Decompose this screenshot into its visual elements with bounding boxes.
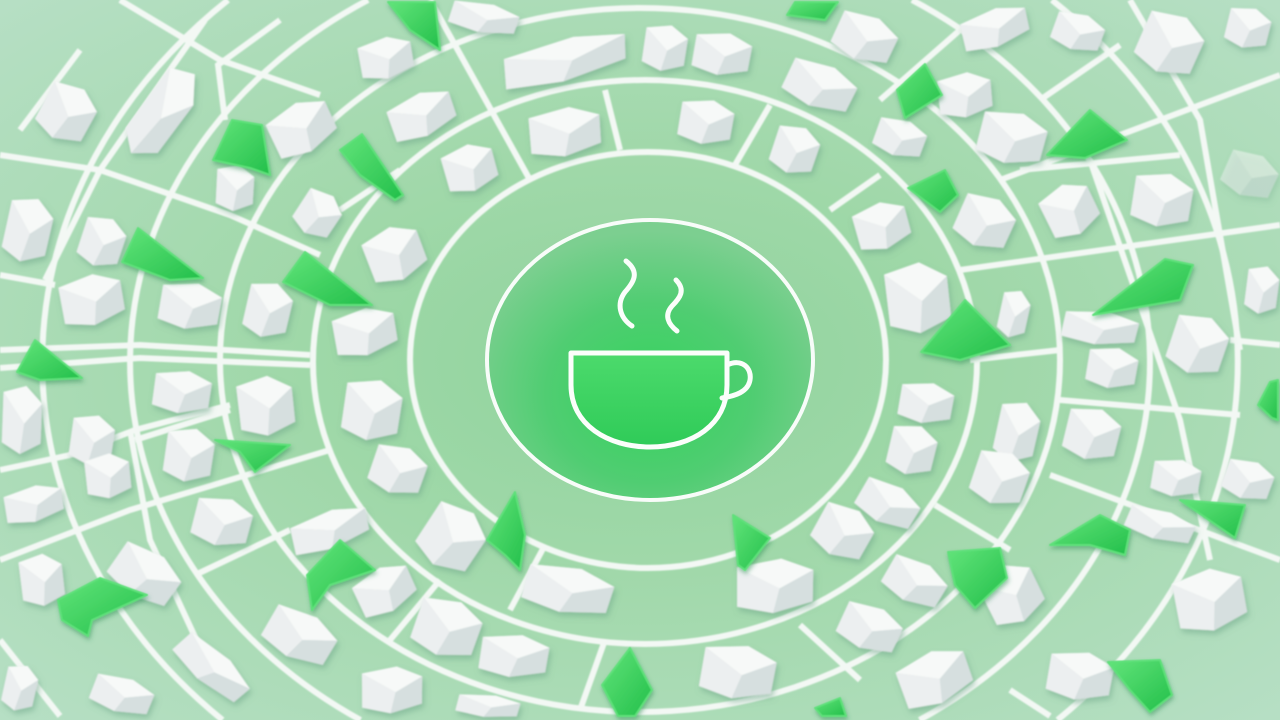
cup handle (722, 363, 750, 398)
cup body (571, 353, 727, 447)
steam left (620, 261, 634, 326)
icon: coffee cup with steam (571, 261, 750, 447)
steam right (668, 280, 681, 331)
central circle plaza (487, 220, 813, 500)
